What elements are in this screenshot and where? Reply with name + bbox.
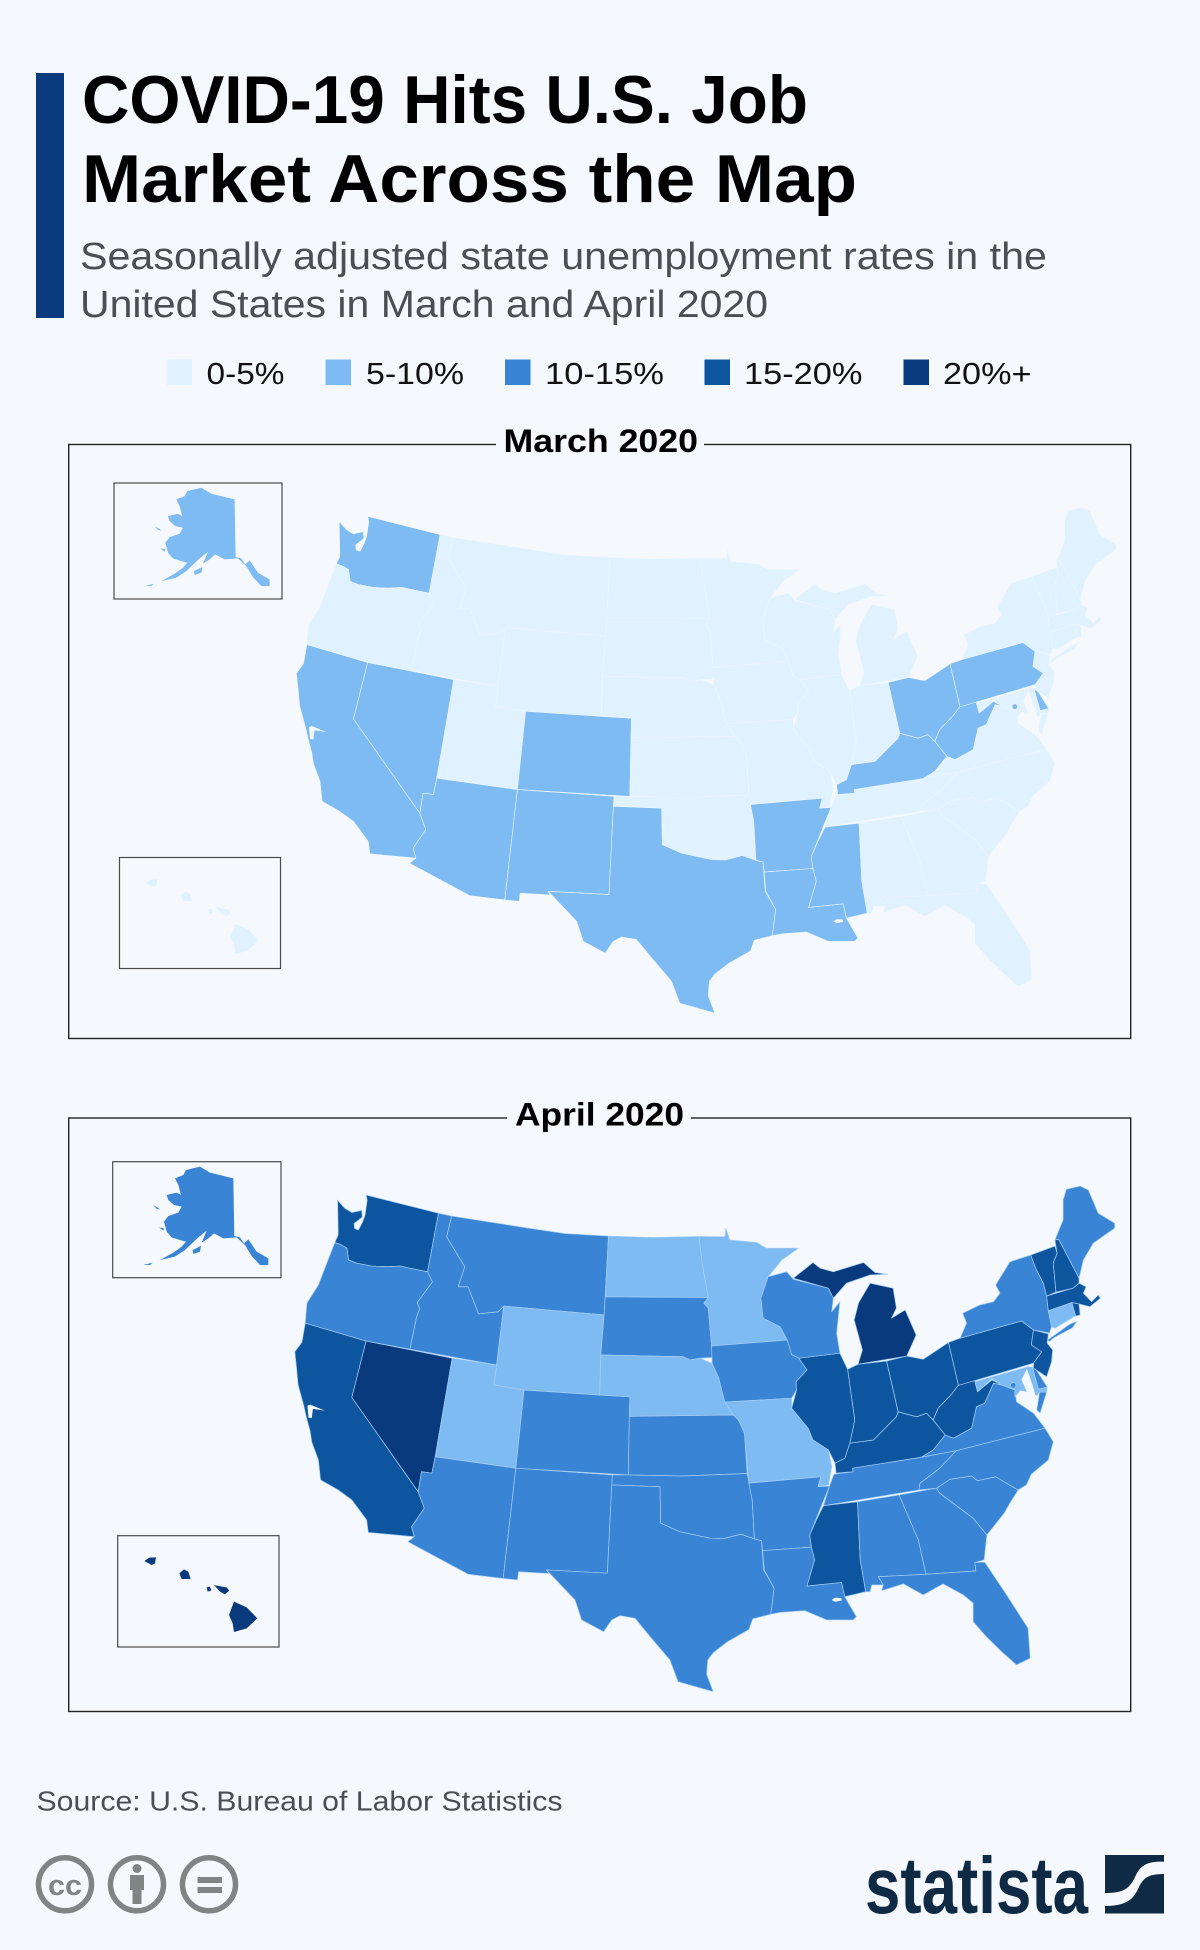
inset frame: Hawaii April xyxy=(118,1536,279,1647)
Rhode Island xyxy=(1072,1302,1080,1316)
West Virginia xyxy=(933,1380,1002,1438)
Colorado xyxy=(517,711,631,796)
subtitle xyxy=(80,236,1047,326)
Florida xyxy=(880,883,1032,986)
District of Columbia xyxy=(1010,1382,1016,1388)
New Mexico xyxy=(505,790,614,901)
North Carolina xyxy=(919,1428,1053,1490)
South Dakota xyxy=(601,1297,712,1360)
New Hampshire xyxy=(1053,1239,1079,1292)
title xyxy=(82,62,857,217)
Connecticut xyxy=(1048,1302,1077,1328)
Massachusetts xyxy=(1047,1283,1100,1311)
Montana xyxy=(448,537,610,636)
Iowa xyxy=(713,661,809,724)
icon: no derivatives xyxy=(182,1858,236,1911)
map: Hawaii March xyxy=(146,879,259,954)
Alabama xyxy=(859,816,928,913)
District of Columbia xyxy=(1012,704,1018,710)
Wyoming xyxy=(494,1306,604,1395)
panel frame: March xyxy=(69,444,1131,1038)
Virginia xyxy=(922,1383,1047,1457)
title accent bar xyxy=(36,73,64,318)
Mississippi xyxy=(807,1502,866,1597)
Pennsylvania xyxy=(950,642,1043,706)
water: Chesapeake Bay, San Francisco Bay, Lake Pontchartrain xyxy=(307,1369,1036,1602)
Idaho xyxy=(410,1213,504,1365)
Georgia xyxy=(901,810,988,896)
Oregon xyxy=(305,1242,432,1349)
Arkansas xyxy=(750,798,831,872)
West Virginia xyxy=(935,701,1003,760)
Oklahoma xyxy=(612,1474,754,1539)
Illinois xyxy=(792,1353,855,1463)
California xyxy=(296,645,426,858)
legend item: 15-20%: 15-20% xyxy=(744,356,862,391)
Vermont xyxy=(1031,1246,1057,1296)
Iowa xyxy=(712,1340,807,1402)
Arizona xyxy=(408,1457,516,1579)
Kentucky xyxy=(837,733,947,795)
Maine xyxy=(1056,507,1116,600)
legend item: 10-15%: 10-15% xyxy=(545,356,664,391)
source note: Source: U.S. Bureau of Labor Statistics xyxy=(36,1786,562,1816)
subtitle: Seasonally adjusted state unemployment rates in the xyxy=(80,236,1047,278)
Ohio xyxy=(887,1342,958,1420)
title: Market Across the Map xyxy=(82,141,857,217)
inset frame: Alaska March xyxy=(114,483,282,599)
inset frame: Hawaii March xyxy=(120,858,280,968)
icon: attribution xyxy=(110,1858,164,1911)
Kansas xyxy=(628,1415,747,1476)
Massachusetts xyxy=(1048,605,1102,632)
Maryland xyxy=(976,688,1049,718)
New Jersey xyxy=(1033,651,1054,698)
inset frame: Alaska April xyxy=(113,1162,281,1278)
map: Hawaii April xyxy=(144,1557,257,1632)
Kentucky xyxy=(835,1412,945,1473)
Michigan Upper Peninsula xyxy=(795,584,889,620)
Texas xyxy=(548,806,776,1013)
panel heading: March 2020: March 2020 xyxy=(504,423,698,459)
Ohio xyxy=(888,664,960,741)
icon: creative commons: cc xyxy=(48,1870,82,1902)
Tennessee xyxy=(823,1451,956,1506)
legend item: 15-20% xyxy=(704,356,862,391)
Michigan Upper Peninsula xyxy=(793,1262,888,1298)
Virginia xyxy=(923,705,1048,779)
Washington xyxy=(336,516,440,593)
legend xyxy=(167,356,1032,391)
Missouri xyxy=(726,720,833,808)
Nevada xyxy=(352,1341,452,1492)
subtitle: United States in March and April 2020 xyxy=(80,284,768,326)
Vermont xyxy=(1032,567,1059,617)
Maine xyxy=(1055,1186,1115,1278)
South Carolina xyxy=(938,797,1020,856)
panel: March 2020 xyxy=(69,423,1131,1038)
New Hampshire xyxy=(1055,561,1081,614)
Washington xyxy=(335,1195,438,1272)
New York xyxy=(960,1255,1077,1341)
panel heading: April 2020: April 2020 xyxy=(515,1096,684,1132)
Colorado xyxy=(516,1390,630,1475)
Indiana xyxy=(849,682,900,765)
Wisconsin xyxy=(763,593,842,680)
Oklahoma xyxy=(613,795,756,860)
Utah xyxy=(435,1358,524,1468)
logo: statista wordmark: statista xyxy=(865,1841,1088,1930)
icon: creative commons xyxy=(38,1858,92,1911)
Idaho xyxy=(412,535,505,686)
Nebraska xyxy=(600,1355,734,1416)
legend item: 10-15% xyxy=(505,356,664,391)
legend item: 0-5% xyxy=(167,356,284,391)
logo: statista mark xyxy=(1105,1855,1164,1914)
legend item: 20%+ xyxy=(904,356,1032,391)
Missouri xyxy=(725,1398,832,1487)
Rhode Island xyxy=(1073,624,1082,637)
legend item: 20%+: 20%+ xyxy=(943,356,1032,391)
California xyxy=(295,1323,424,1537)
water: Chesapeake Bay, San Francisco Bay, Lake Pontchartrain xyxy=(309,690,1037,923)
Maryland xyxy=(975,1367,1047,1397)
Minnesota xyxy=(699,1228,798,1346)
South Dakota xyxy=(602,618,714,681)
Louisiana xyxy=(764,868,858,941)
Tennessee xyxy=(825,772,958,827)
Illinois xyxy=(793,675,856,785)
Mississippi xyxy=(809,823,867,918)
panel: April 2020 xyxy=(69,1096,1131,1712)
panel frame: April xyxy=(69,1118,1131,1712)
Oregon xyxy=(307,564,434,671)
Louisiana xyxy=(763,1547,856,1620)
Alabama xyxy=(857,1495,926,1592)
Texas xyxy=(547,1485,774,1692)
Georgia xyxy=(899,1488,987,1574)
legend item: 0-5%: 0-5% xyxy=(206,356,284,391)
Indiana xyxy=(848,1361,898,1443)
Montana xyxy=(447,1216,608,1315)
New Mexico xyxy=(503,1468,612,1580)
Michigan Lower Peninsula xyxy=(856,605,918,686)
Nevada xyxy=(353,662,454,813)
legend item: 5-10%: 5-10% xyxy=(366,356,464,391)
Arizona xyxy=(409,778,517,900)
Arkansas xyxy=(749,1477,829,1551)
South Carolina xyxy=(936,1476,1018,1535)
North Dakota xyxy=(607,557,710,619)
Michigan Lower Peninsula xyxy=(854,1283,916,1364)
Kansas xyxy=(630,736,749,797)
map: Alaska March xyxy=(145,488,270,586)
Florida xyxy=(878,1562,1030,1665)
map: contiguous states April xyxy=(295,1186,1115,1692)
Delaware xyxy=(1034,689,1049,711)
legend item: 5-10% xyxy=(326,356,464,391)
Wisconsin xyxy=(761,1272,840,1358)
map: Alaska April xyxy=(143,1167,268,1265)
Connecticut xyxy=(1050,624,1078,650)
New Jersey xyxy=(1031,1330,1053,1377)
title: COVID-19 Hits U.S. Job xyxy=(82,62,808,138)
Wyoming xyxy=(495,627,606,716)
Minnesota xyxy=(701,550,800,667)
Delaware xyxy=(1032,1367,1047,1389)
Pennsylvania xyxy=(948,1321,1042,1385)
map: contiguous states March xyxy=(296,507,1116,1013)
North Dakota xyxy=(605,1236,708,1297)
New York xyxy=(962,576,1078,663)
North Carolina xyxy=(920,750,1055,811)
Utah xyxy=(437,680,526,790)
Nebraska xyxy=(601,676,735,738)
